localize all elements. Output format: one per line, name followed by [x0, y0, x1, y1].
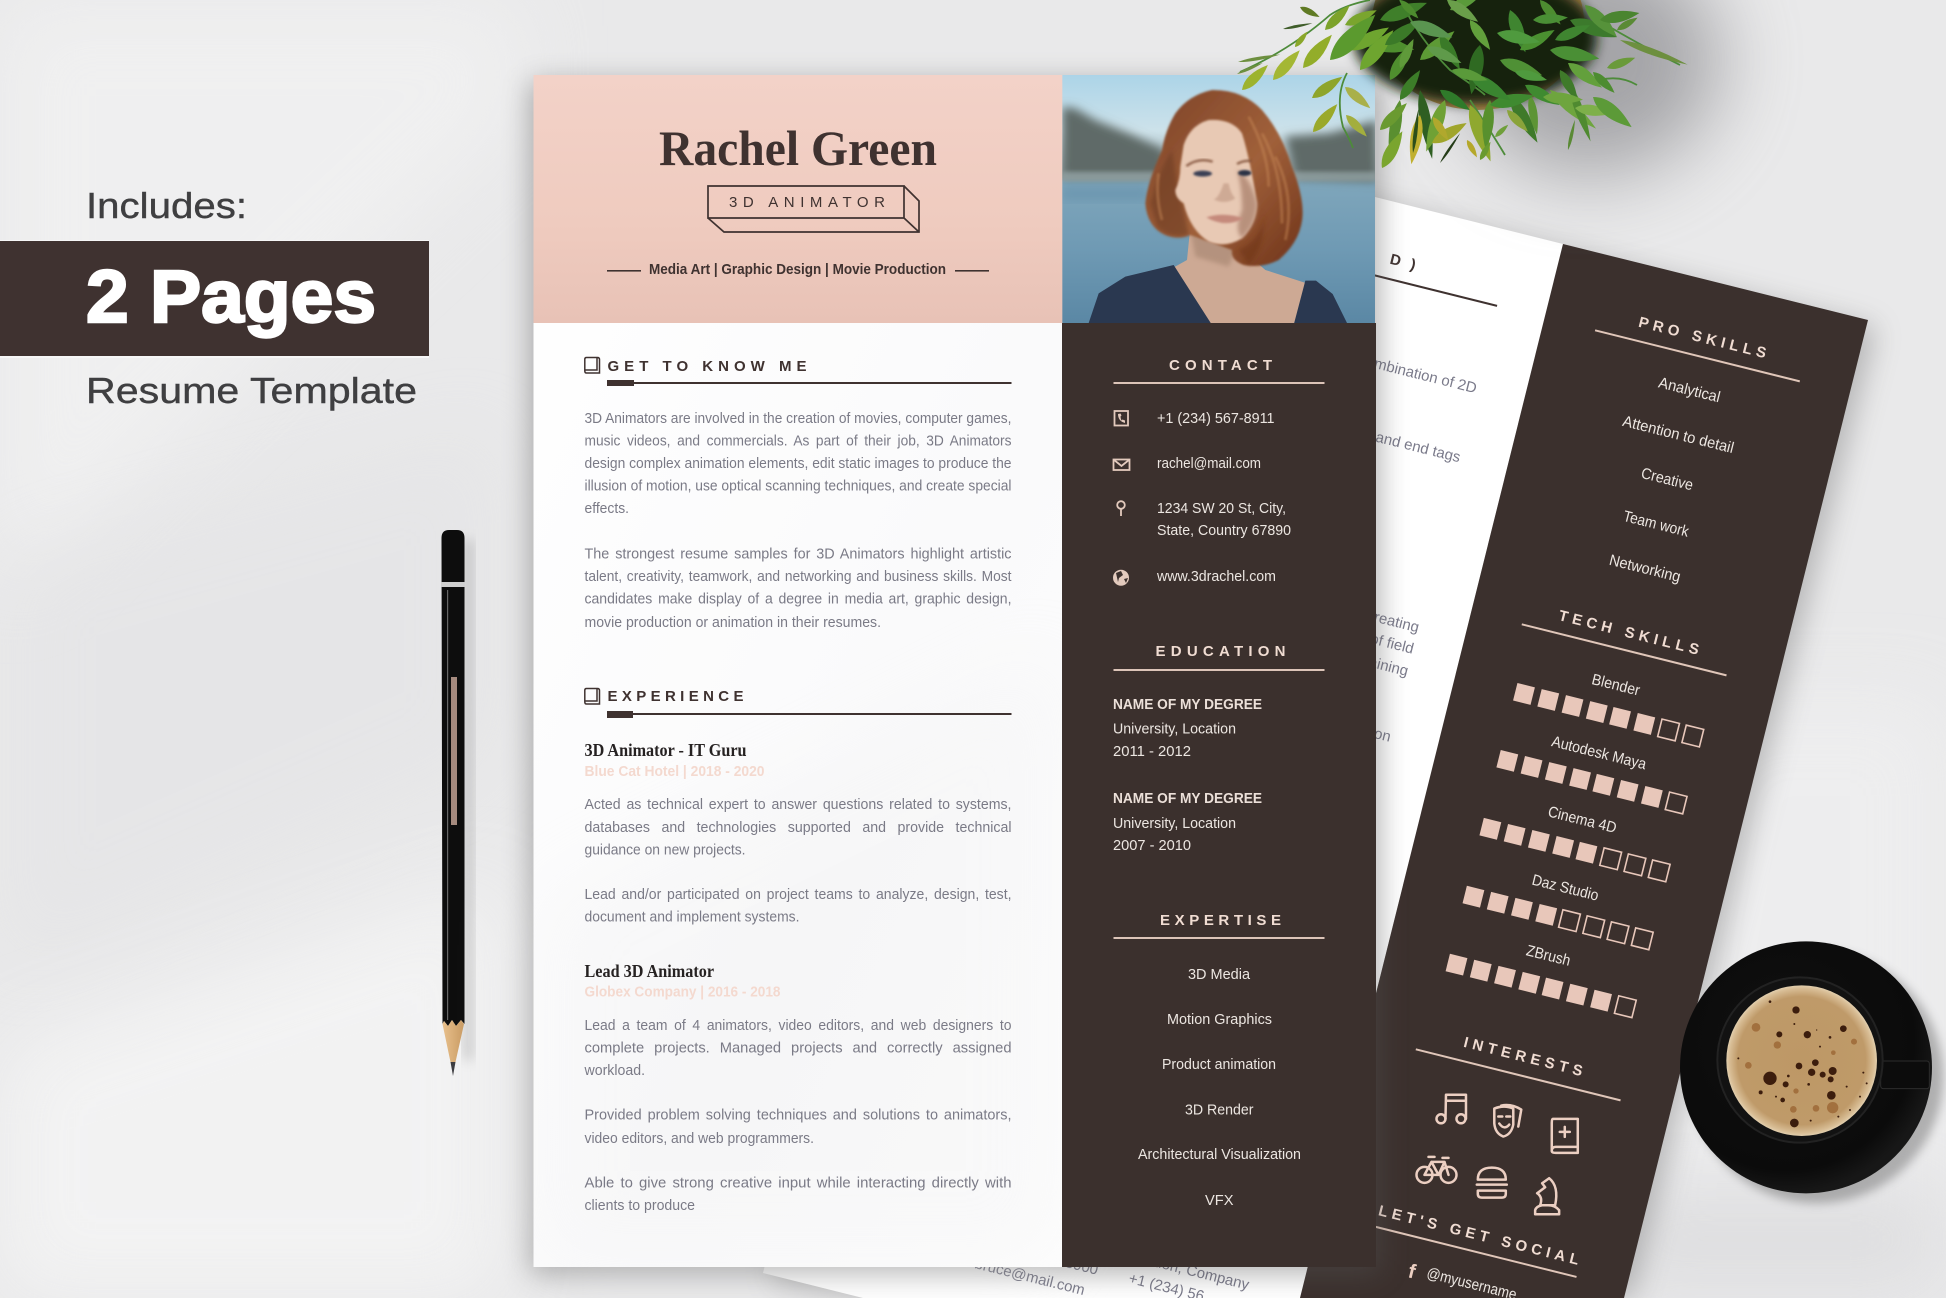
- back page: pro skills: Attention to detail: [1621, 413, 1736, 457]
- back page: interests: [1384, 1023, 1627, 1228]
- text block: intro paragraph 2: talent, creativity, teamwork, and networking and business skills. Most: [584, 568, 1012, 585]
- job title box: [708, 186, 919, 232]
- heading: experience: [585, 688, 1012, 718]
- handle: [1881, 1061, 1929, 1089]
- section: education: [1113, 643, 1324, 854]
- front resume page: [534, 70, 1377, 1267]
- skill: ZBrush: [1446, 925, 1643, 1018]
- back page: left column fragments: creating: [1365, 607, 1421, 636]
- coffee cup: [1680, 941, 1943, 1203]
- section: contact: www.3drachel.com: [1156, 568, 1276, 585]
- section: education: NAME OF MY DEGREE: [1113, 791, 1262, 807]
- section: expertise: EXPERTISE: [1160, 912, 1281, 929]
- section: contact: State, Country 67890: [1157, 522, 1291, 539]
- heading: experience: EXPERIENCE: [608, 688, 744, 705]
- job: Lead 3D Animator: workload.: [584, 1062, 645, 1079]
- text block: intro paragraph 2: The strongest resume samples for 3D Animators highlight artistic: [584, 546, 1012, 562]
- section: expertise: 3D Media: [1188, 966, 1251, 983]
- header panel: [534, 75, 1062, 323]
- section: education: 2011 - 2012: [1113, 743, 1191, 760]
- icon: bicycle: [1416, 1157, 1456, 1183]
- back page: left column fragments: D ): [1388, 251, 1420, 274]
- plant shadow: [1460, 0, 1720, 175]
- section: contact: 1234 SW 20 St, City,: [1157, 500, 1286, 517]
- job: 3D Animator: document and implement systems.: [584, 908, 800, 926]
- section: expertise: Motion Graphics: [1167, 1011, 1272, 1028]
- panel: experience: [584, 688, 1012, 1214]
- job: 3D Animator: Acted as technical expert to answer questions related to systems,: [584, 796, 1012, 813]
- pencil: [441, 530, 473, 1076]
- section: contact: rachel@mail.com: [1157, 455, 1261, 472]
- text block: intro paragraph 2: movie production or animation in their resumes.: [584, 614, 881, 631]
- back page: left column fragments: bruce@mail.com: [973, 1255, 1087, 1298]
- section: education: EDUCATION: [1156, 643, 1286, 660]
- skill: Blender: Blender: [1590, 671, 1642, 700]
- left caption: [0, 185, 429, 411]
- icon: location pin: [1117, 501, 1125, 516]
- text block: intro paragraph 1: [584, 410, 1012, 517]
- section: contact: +1 (234) 567-8911: [1157, 410, 1274, 427]
- job: Lead 3D Animator: complete projects. Managed projects and correctly assigned: [584, 1040, 1012, 1056]
- job: Lead 3D Animator: Globex Company | 2016 - 2018: [584, 984, 780, 1000]
- caption band: 2 Pages: 2 Pages: [86, 255, 376, 338]
- section: education: University, Location: [1113, 720, 1236, 738]
- text block: intro paragraph 1: illusion of motion, use optical scanning techniques, and create special: [584, 478, 1012, 494]
- back page: left column fragments: and end tags: [1374, 429, 1462, 466]
- icon: facebook: f: [1406, 1260, 1418, 1284]
- back page: tech skills: TECH SKILLS: [1557, 607, 1701, 659]
- icon: chess knight: [1535, 1178, 1559, 1214]
- back page: pro skills: PRO SKILLS: [1637, 314, 1768, 362]
- caption band: 2 Pages: [0, 240, 429, 358]
- section: expertise: [1114, 912, 1324, 1209]
- job: Lead 3D Animator: Able to give strong creative input while interacting directly with: [584, 1174, 1012, 1192]
- skill: ZBrush: ZBrush: [1524, 942, 1572, 970]
- job: 3D Animator: guidance on new projects.: [584, 842, 746, 858]
- back page: pro skills: Networking: [1607, 552, 1682, 586]
- front page shadow: [530, 82, 1380, 1274]
- coffee bubbles: [1737, 1000, 1868, 1127]
- back page: left column fragments: training: [1358, 652, 1410, 680]
- job: Lead 3D Animator: [584, 961, 1012, 1214]
- back page: pro skills: Analytical: [1657, 375, 1722, 406]
- job: Lead 3D Animator: Lead 3D Animator: [584, 961, 714, 981]
- back resume page shadow: [771, 124, 1876, 1298]
- icon: globe: [1113, 570, 1129, 586]
- back page: left column fragments: of field: [1369, 630, 1416, 658]
- section: expertise: Product animation: [1162, 1056, 1276, 1073]
- back page: pro skills: Creative: [1639, 465, 1695, 494]
- heading: get to know me: [585, 358, 1012, 386]
- icon: book with cross: [1552, 1119, 1578, 1153]
- caption: Includes: Includes:: [86, 185, 247, 226]
- back page: social: LET'S GET SOCIAL: [1377, 1202, 1581, 1269]
- plant: [1236, 0, 1689, 171]
- skill: Daz Studio: [1463, 857, 1660, 950]
- back resume page: [763, 116, 1868, 1298]
- text block: intro paragraph 1: music videos, and commercials. As part of their job, 3D Animators: [584, 432, 1012, 450]
- icon: burger: [1477, 1168, 1507, 1198]
- back page: left column fragments: [792, 167, 1506, 1298]
- text block: intro paragraph 2: candidates make display of a degree in media art, graphic design,: [584, 590, 1012, 608]
- photo: portrait: [1062, 70, 1377, 325]
- back page: interests: INTERESTS: [1462, 1034, 1584, 1080]
- panel: get to know me: [584, 358, 1012, 631]
- back page: left column fragments: combination of 2D: [1357, 351, 1479, 397]
- job: Lead 3D Animator: Lead a team of 4 animators, video editors, and web designers to: [584, 1017, 1012, 1034]
- subtitle: Media Art | Graphic Design | Movie Production: [649, 261, 946, 278]
- back page: pro skills: [1540, 304, 1806, 603]
- caption: Resume Template: Resume Template: [86, 370, 417, 411]
- back page: left column fragments: on: [1372, 725, 1393, 746]
- text block: intro paragraph 1: design complex animation elements, edit static images to produce the: [584, 455, 1012, 472]
- section: education: 2007 - 2010: [1113, 837, 1191, 854]
- job: 3D Animator: databases and technologies supported and provide technical: [584, 819, 1012, 836]
- skill: Daz Studio: Daz Studio: [1530, 872, 1600, 905]
- heading: get to know me: GET TO KNOW ME: [608, 358, 806, 375]
- back page: left column fragments: Location, Company: [1121, 1246, 1251, 1294]
- text block: intro paragraph 1: effects.: [584, 500, 629, 517]
- job: 3D Animator: 3D Animator - IT Guru: [584, 740, 746, 760]
- back page: social: [1361, 1202, 1583, 1298]
- skill: Cinema 4D: [1479, 789, 1677, 882]
- back page: tech skills: [1436, 599, 1733, 1020]
- skill: Cinema 4D: Cinema 4D: [1546, 804, 1618, 837]
- icon: theatre masks: [1494, 1105, 1521, 1137]
- panel: dark sidebar: [1062, 323, 1376, 1267]
- icon: music note: [1436, 1095, 1466, 1123]
- job: Lead 3D Animator: Provided problem solving techniques and solutions to animators,: [584, 1106, 1012, 1124]
- job: 3D Animator: [584, 740, 1012, 926]
- section: contact: [1113, 357, 1324, 586]
- section: expertise: Architectural Visualization: [1138, 1146, 1301, 1163]
- skill: Autodesk Maya: Autodesk Maya: [1550, 733, 1648, 773]
- section: education: NAME OF MY DEGREE: [1113, 697, 1262, 713]
- job: 3D Animator: Lead and/or participated on project teams to analyze, design, test,: [584, 886, 1012, 903]
- coffee surface: [1726, 985, 1877, 1136]
- cup rim: [1717, 977, 1883, 1143]
- section: expertise: 3D Render: [1185, 1102, 1254, 1118]
- name: Rachel Green: [659, 120, 937, 176]
- icon: phone: [1114, 411, 1128, 426]
- job: 3D Animator: Blue Cat Hotel | 2018 - 2020: [584, 764, 764, 780]
- skill: Blender: [1513, 654, 1711, 747]
- section: expertise: VFX: [1205, 1192, 1234, 1209]
- text block: intro paragraph 2: [584, 546, 1012, 631]
- back page: left column fragments: +1 (234) 567 8900: [976, 1232, 1100, 1279]
- section: contact: CONTACT: [1169, 357, 1272, 374]
- job: Lead 3D Animator: video editors, and web programmers.: [584, 1130, 814, 1147]
- saucer: [1680, 941, 1932, 1193]
- skill: Autodesk Maya: [1496, 722, 1694, 814]
- back page: pro skills: Team work: [1621, 508, 1691, 541]
- text block: intro paragraph 1: 3D Animators are involved in the creation of movies, computer games,: [584, 410, 1012, 427]
- icon: mail: [1114, 460, 1130, 470]
- section: education: University, Location: [1113, 815, 1236, 832]
- job title box: 3D ANIMATOR: [729, 194, 885, 211]
- job: Lead 3D Animator: clients to produce: [584, 1197, 695, 1214]
